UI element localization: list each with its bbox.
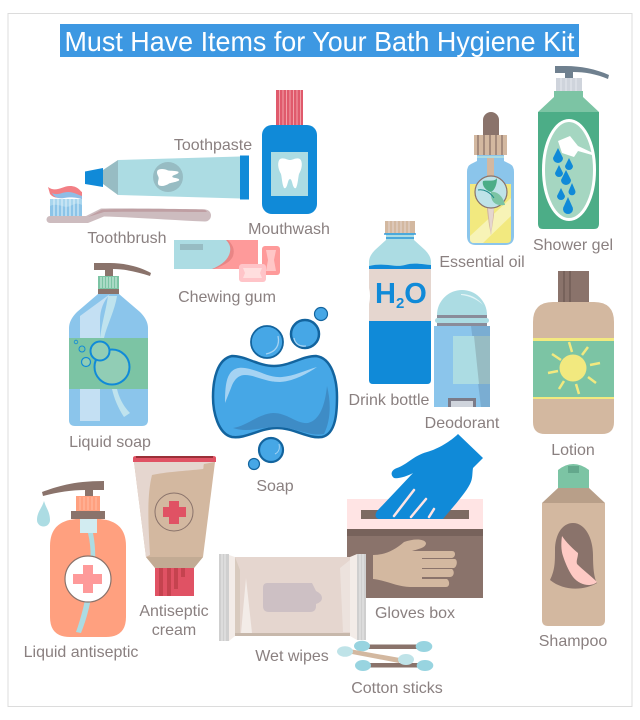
- glove in box opening: [376, 434, 483, 519]
- label: Soap: Soap: [256, 478, 294, 495]
- label: Antiseptic cream: cream: [152, 622, 196, 639]
- drink bottle: [349, 221, 431, 409]
- label: Antiseptic cream: [139, 603, 209, 639]
- shampoo: [539, 464, 607, 650]
- liquid antiseptic: [24, 481, 138, 661]
- shower gel: [533, 66, 613, 254]
- wet wipes: [219, 554, 366, 665]
- lotion: [533, 271, 614, 459]
- label: Toothbrush: Toothbrush: [87, 230, 167, 247]
- H2O mark: 2: [396, 295, 404, 312]
- label: Cotton sticks: Cotton sticks: [351, 680, 443, 697]
- label: Deodorant: Deodorant: [425, 415, 500, 432]
- deodorant: [425, 290, 500, 432]
- H2O mark: O: [404, 278, 427, 310]
- label: Liquid antiseptic: Liquid antiseptic: [24, 644, 138, 661]
- liquid soap: [69, 263, 151, 451]
- mouthwash: [248, 90, 330, 238]
- antiseptic cream: [133, 456, 216, 639]
- essential oil: [439, 112, 525, 271]
- label: Mouthwash: Mouthwash: [248, 221, 330, 238]
- soap: [213, 308, 337, 495]
- label: Chewing gum: Chewing gum: [178, 289, 276, 306]
- label: Drink bottle: Drink bottle: [349, 392, 430, 409]
- toothpaste: [85, 137, 252, 200]
- label: Toothpaste: Toothpaste: [174, 137, 252, 154]
- gloves box: [347, 434, 483, 622]
- label: Essential oil: Essential oil: [439, 254, 525, 271]
- toothbrush: [47, 186, 211, 247]
- cotton sticks: [337, 641, 443, 697]
- chewing gum: [174, 240, 280, 306]
- title: Must Have Items for Your Bath Hygiene Kit: [64, 26, 575, 57]
- label: Antiseptic cream: Antiseptic: [139, 603, 209, 620]
- label: Wet wipes: Wet wipes: [255, 648, 329, 665]
- H2O mark: H: [375, 278, 396, 310]
- label: Shower gel: Shower gel: [533, 237, 613, 254]
- label: Lotion: Lotion: [551, 442, 595, 459]
- open hand: [373, 540, 457, 587]
- label: Shampoo: Shampoo: [539, 633, 607, 650]
- label: Liquid soap: Liquid soap: [69, 434, 151, 451]
- label: Gloves box: Gloves box: [375, 605, 455, 622]
